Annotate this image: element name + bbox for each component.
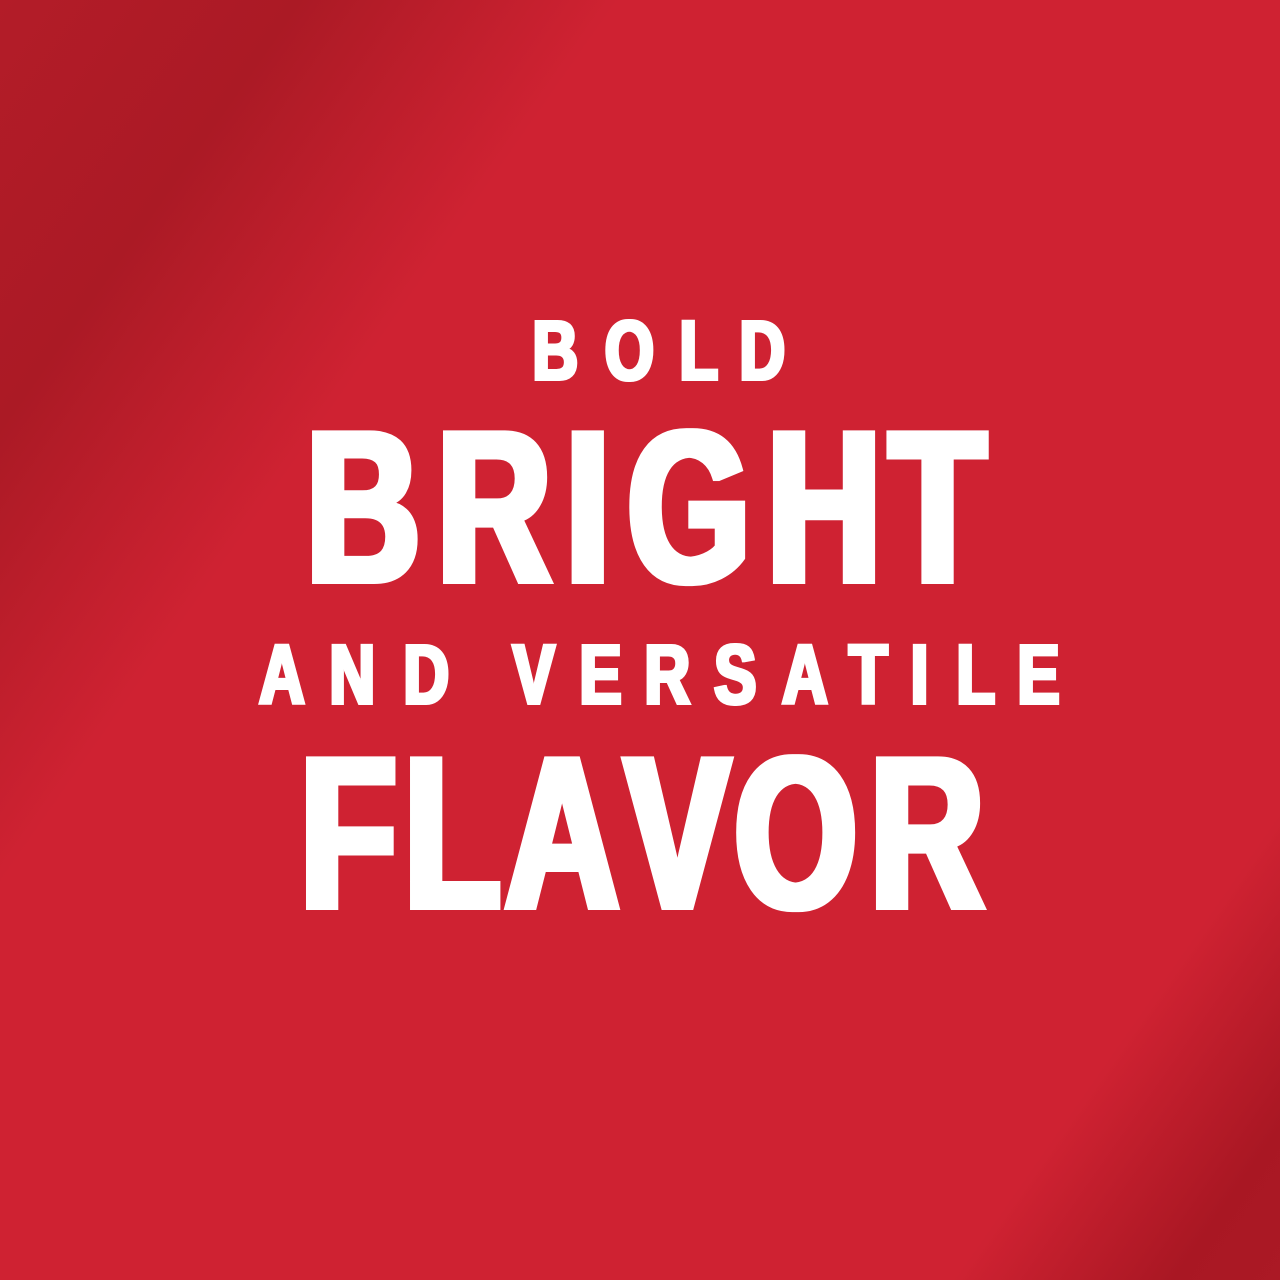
heading: AND VERSATILE: AND VERSATILE	[259, 628, 1060, 722]
heading: BRIGHT: BRIGHT	[306, 387, 986, 628]
heading: FLAVOR: FLAVOR	[300, 713, 984, 954]
heading: BOLD: BOLD	[532, 304, 785, 398]
